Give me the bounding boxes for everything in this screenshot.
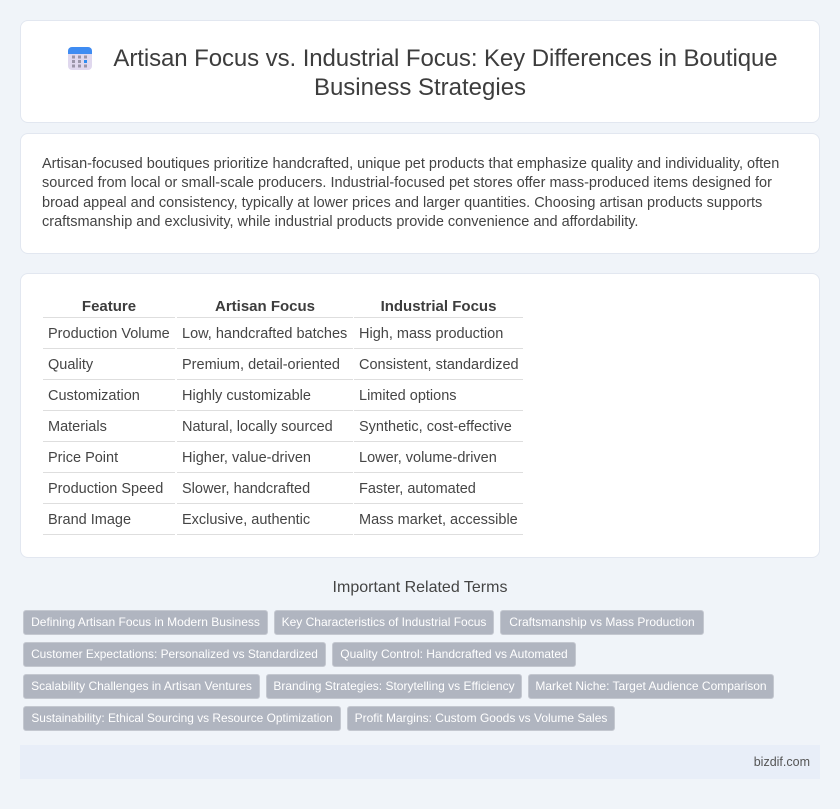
intro text: craftsmanship and exclusivity, while industrial products provide convenience and affordability. — [42, 214, 638, 230]
intro text: sourced from local or small-scale producers. Industrial-focused pet stores offer mass-produced items designed for — [42, 175, 772, 191]
footer source text: bizdif.com — [754, 755, 810, 769]
comparison table: Price Point — [48, 450, 118, 466]
related terms heading: Important Related Terms — [333, 579, 507, 596]
comparison table: Premium, detail-oriented — [182, 357, 340, 373]
comparison table: Natural, locally sourced — [182, 419, 333, 435]
comparison table: Artisan Focus — [215, 298, 315, 315]
title: Artisan Focus vs. Industrial Focus: Key Differences in Boutique — [113, 45, 778, 72]
icon: calendar grid — [68, 47, 92, 70]
related terms tags: Customer Expectations: Personalized vs Standardized — [31, 647, 318, 661]
related terms tags: Profit Margins: Custom Goods vs Volume Sales — [355, 711, 607, 725]
comparison table: Low, handcrafted batches — [182, 326, 347, 342]
related terms tags: Quality Control: Handcrafted vs Automated — [340, 647, 568, 661]
comparison table: Exclusive, authentic — [182, 512, 310, 528]
panel: introduction — [20, 133, 820, 254]
title — [113, 45, 778, 101]
related terms tags — [23, 610, 774, 731]
header card — [20, 20, 820, 123]
comparison table — [43, 298, 523, 535]
comparison table: Production Volume — [48, 326, 170, 342]
comparison table: Mass market, accessible — [359, 512, 518, 528]
comparison table: Production Speed — [48, 481, 163, 497]
comparison table: Faster, automated — [359, 481, 476, 497]
comparison table: Feature — [82, 298, 136, 315]
intro text: Artisan-focused boutiques prioritize handcrafted, unique pet products that emphasize quality and individuality, often — [42, 156, 779, 172]
panel: comparison table — [20, 273, 820, 558]
comparison table: Materials — [48, 419, 107, 435]
title: Business Strategies — [314, 74, 526, 101]
related terms tags: Market Niche: Target Audience Comparison — [535, 679, 767, 693]
related terms tags: Sustainability: Ethical Sourcing vs Resource Optimization — [31, 711, 333, 725]
related terms tags: Key Characteristics of Industrial Focus — [282, 615, 486, 629]
comparison table: Brand Image — [48, 512, 131, 528]
comparison table: Higher, value-driven — [182, 450, 311, 466]
comparison table: Synthetic, cost-effective — [359, 419, 512, 435]
related terms tags: Craftsmanship vs Mass Production — [509, 615, 695, 629]
comparison table: High, mass production — [359, 326, 503, 342]
related terms tags: Scalability Challenges in Artisan Ventures — [31, 679, 252, 693]
comparison table: Customization — [48, 388, 140, 404]
comparison table: Slower, handcrafted — [182, 481, 310, 497]
comparison table: Consistent, standardized — [359, 357, 519, 373]
intro text: broad appeal and consistency, typically at lower prices and larger quantities. Choosing artisan products supports — [42, 195, 762, 211]
comparison table: Quality — [48, 357, 93, 373]
related terms tags: Branding Strategies: Storytelling vs Efficiency — [273, 679, 515, 693]
intro text — [42, 156, 779, 230]
related terms tags: Defining Artisan Focus in Modern Business — [31, 615, 260, 629]
comparison table: Lower, volume-driven — [359, 450, 497, 466]
comparison table: Industrial Focus — [381, 298, 496, 315]
footer bar — [20, 745, 820, 779]
comparison table: Limited options — [359, 388, 457, 404]
comparison table: Highly customizable — [182, 388, 311, 404]
